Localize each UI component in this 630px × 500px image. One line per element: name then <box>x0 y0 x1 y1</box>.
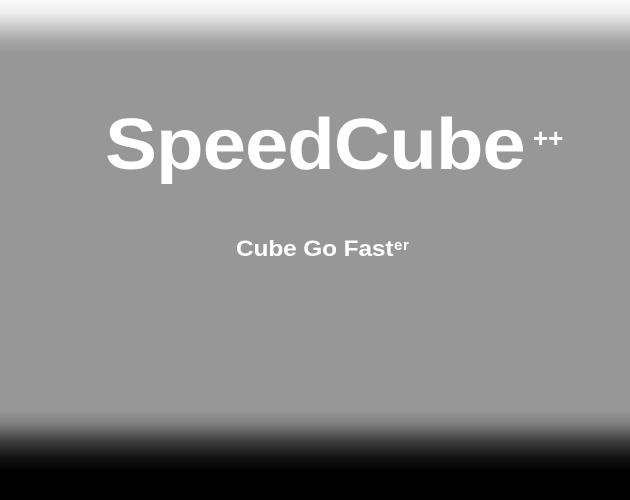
tagline superscript: er <box>394 237 409 254</box>
title superscript: ++ <box>533 123 563 153</box>
title: SpeedCube <box>105 105 525 185</box>
tagline: Cube Go Fast <box>236 236 393 261</box>
